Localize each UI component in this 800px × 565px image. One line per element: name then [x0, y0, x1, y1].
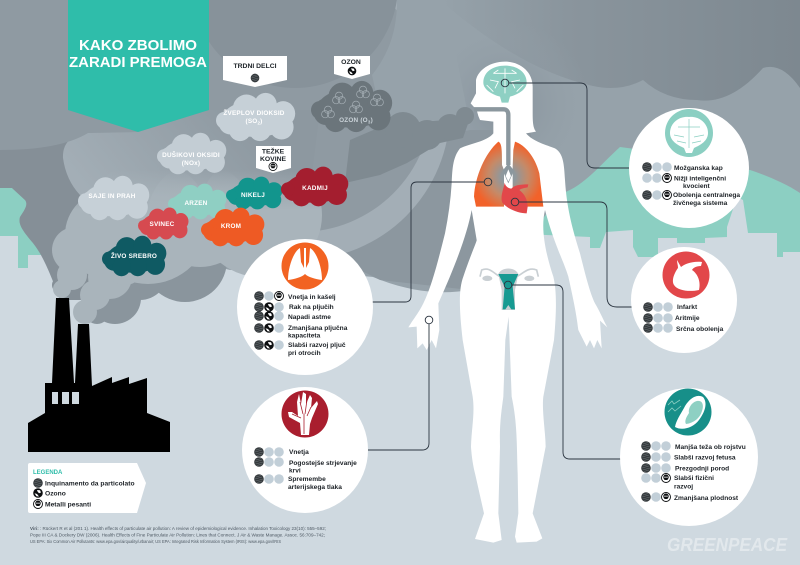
panel: lungs [237, 239, 373, 375]
label: trdni delci: TRDNI DELCI [233, 63, 277, 70]
cloud: nikelj [226, 177, 282, 209]
title banner: KAKO ZBOLIMO [79, 37, 197, 54]
brain effect rows: živčnega sistema [673, 200, 728, 207]
left dark layer [0, 140, 100, 300]
hand effect rows [254, 447, 357, 491]
icon: lungs [282, 242, 328, 290]
hand effect rows: Spremembe [288, 476, 326, 483]
title banner: ZARADI PREMOGA [69, 54, 207, 71]
cloud: žveplov dioksid: 2 [257, 120, 260, 126]
cloud: ozon: 3 [368, 120, 371, 124]
smoke cloud [0, 0, 800, 324]
panel: brain [629, 108, 749, 228]
sources: US EPA: Six Common Air Pollutants: www.epa.gov/airquality/urbanair; US EPA: Integrated Risk Information System (IRIS): www.epa.gov/IRIS [30, 539, 281, 545]
lungs [474, 142, 543, 207]
lower light layer [65, 153, 322, 284]
heart effect rows [643, 302, 724, 333]
panel: fetus [620, 388, 758, 526]
cloud: kadmij: KADMIJ [302, 185, 328, 192]
lung effect rows: Slabši razvoj pljuč [288, 342, 346, 349]
cloud: žveplov dioksid: ŽVEPLOV DIOKSID [223, 108, 285, 117]
label: trdni delci [223, 56, 287, 87]
cloud: živo srebro [102, 236, 166, 276]
smoke to mouth [345, 107, 474, 183]
cloud: žveplov dioksid: (SO [246, 118, 257, 125]
label: težke kovine: KOVINE [260, 156, 286, 163]
brain effect rows [642, 162, 740, 207]
sources [30, 526, 326, 545]
lung effect rows: Rak na pljučih [289, 304, 334, 311]
legend: Inquinamento da particolato [45, 480, 135, 488]
cloud: saje in prah [78, 176, 149, 220]
smoke base layer [0, 0, 800, 292]
legend [28, 463, 146, 513]
hand effect rows: krvi [289, 468, 301, 474]
top dark [192, 0, 398, 88]
cloud: arzen [168, 184, 226, 219]
human body [408, 62, 607, 543]
cloud: kadmij [281, 167, 348, 206]
cloud: ozon: ) [371, 117, 373, 124]
legend: Metalli pesanti [45, 502, 91, 508]
hand effect rows: Pogostejše strjevanje [289, 460, 357, 467]
fetus effect rows [641, 441, 746, 502]
brain effect rows: Možganska kap [674, 165, 723, 172]
fetus effect rows: Zmanjšana plodnost [674, 495, 739, 502]
uterus [480, 268, 538, 310]
fetus effect rows: Slabši fizični [674, 475, 714, 482]
fetus effect rows: razvoj [674, 484, 693, 490]
lung effect rows: kapaciteta [288, 332, 321, 340]
greenpeace logo: GREENPEACE [667, 535, 788, 555]
fetus effect rows: Manjša teža ob rojstvu [675, 444, 746, 451]
cloud: krom [201, 208, 264, 246]
label: ozon: OZON [341, 59, 361, 66]
cloud: arzen: ARZEN [184, 200, 208, 207]
central rings [150, 0, 450, 260]
icon: brain [665, 109, 713, 157]
hand effect rows: Vnetja [289, 449, 309, 456]
heart [502, 183, 528, 213]
lung effect rows: Napadi astme [288, 314, 331, 321]
heart effect rows: Srčna obolenja [676, 326, 724, 333]
cloud: svinec: SVINEC [150, 221, 175, 228]
connector: hand [365, 316, 433, 450]
factory [28, 298, 170, 452]
sources: Viri: : Rückert R et al (201 1). Health effects of particulate air pollution: A review of epidemiological evidence. Inhalation Toxicology 23(10): 555–592; [30, 526, 326, 532]
icon: hand [282, 390, 328, 438]
cloud: saje in prah: SAJE IN PRAH [88, 193, 136, 200]
brain effect rows: kvocient [683, 183, 711, 190]
cloud: žveplov dioksid: ) [260, 118, 262, 125]
cloud: dušikovi oksidi: DUŠIKOVI OKSIDI [162, 150, 220, 159]
lung effect rows [254, 291, 348, 357]
lower lobes [85, 218, 227, 324]
cloud: svinec [138, 208, 188, 239]
connector: heart [511, 198, 640, 307]
legend: Ozono [45, 490, 66, 498]
lung effect rows: Zmanjšana pljučna [288, 325, 348, 332]
fetus effect rows: Slabši razvoj fetusa [674, 454, 736, 462]
cloud: ozon: OZON (O [339, 117, 368, 124]
top left layer [0, 0, 209, 150]
panel: hand [242, 387, 368, 513]
bronchi [503, 163, 514, 183]
cloud: krom: KROM [221, 223, 241, 230]
heart effect rows: Infarkt [677, 304, 698, 311]
cloud: ozon [311, 81, 392, 132]
sources: Pope III CA & Dockery DW (2006). Health Effects of Fine Particulate Air Pollution: Lines that Connect. J Air & Waste Manage. Assoc. 56:709–742; [30, 532, 325, 538]
left mid layer [63, 110, 320, 270]
connector: lungs [365, 178, 492, 302]
trachea [474, 109, 508, 165]
lung effect rows: pri otrocih [288, 350, 321, 357]
label: ozon [334, 56, 370, 79]
top right scallops [440, 0, 800, 101]
heart effect rows: Aritmije [675, 315, 700, 322]
connector: brain [501, 79, 650, 168]
lung effect rows: Vnetja in kašelj [288, 294, 336, 301]
cloud: živo srebro: ŽIVO SREBRO [111, 251, 157, 260]
title banner [68, 0, 209, 132]
brain effect rows: Obolenja centralnega [673, 192, 740, 199]
icon: fetus [664, 388, 712, 436]
cloud: dušikovi oksidi [157, 133, 226, 174]
legend: LEGENDA [33, 470, 63, 476]
fetus effect rows: Prezgodnji porod [675, 466, 729, 472]
brain [483, 66, 527, 103]
cloud: žveplov dioksid [216, 93, 295, 141]
brain effect rows: Nižji inteligenčni [674, 176, 726, 182]
label: težke kovine [256, 146, 291, 173]
panel: heart [631, 247, 737, 353]
cloud: dušikovi oksidi: (NOx) [182, 160, 200, 167]
connector: uterus [504, 281, 625, 459]
hand effect rows: arterijskega tlaka [288, 484, 342, 491]
label: težke kovine: TEŽKE [262, 146, 285, 156]
icon: heart [662, 252, 710, 298]
cloud: nikelj: NIKELJ [241, 192, 265, 199]
